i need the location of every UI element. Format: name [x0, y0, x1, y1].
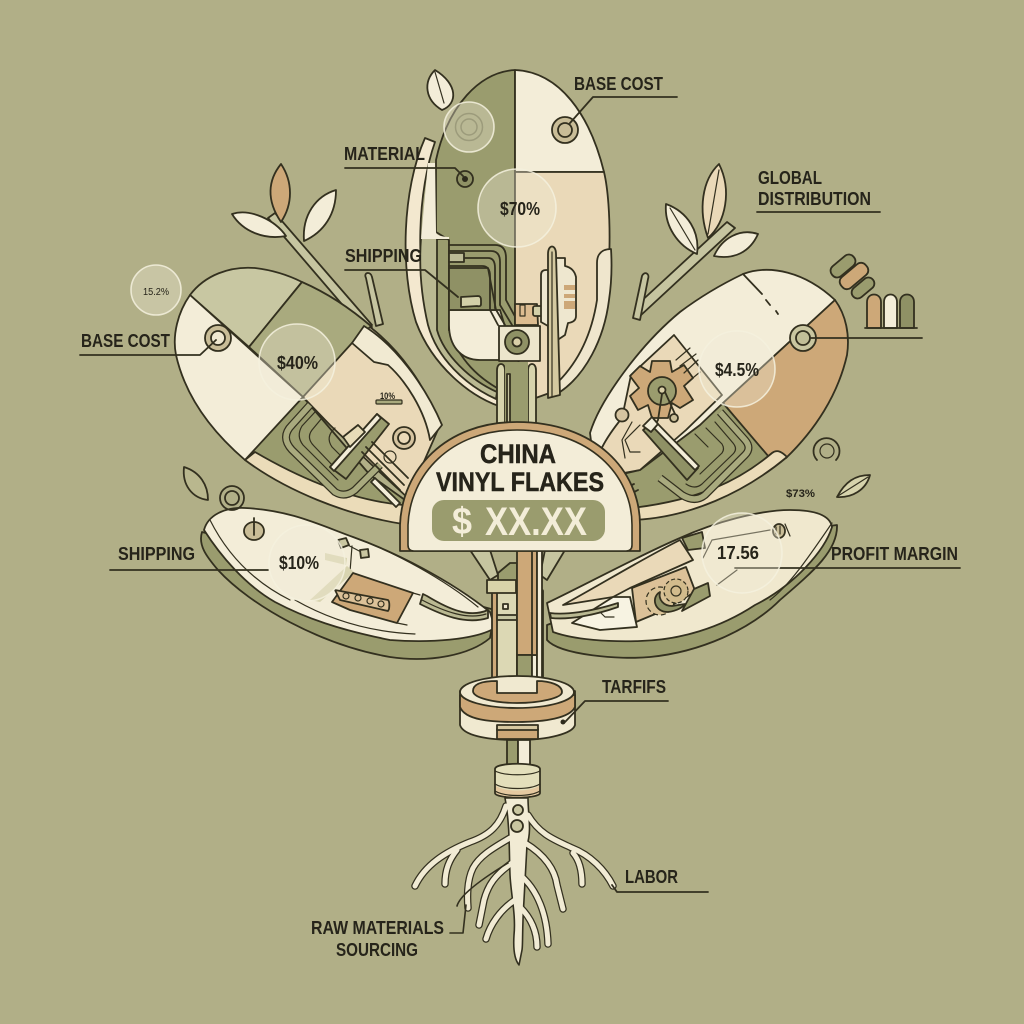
label: global distribution: GLOBAL [758, 168, 822, 188]
sector: olive lower [590, 403, 770, 520]
price pill: XX.XX [485, 500, 587, 544]
label: base cost top: BASE COST [574, 74, 663, 94]
panel: lower-left petal [201, 508, 495, 659]
bubble: $40% [259, 324, 335, 400]
sector: olive [249, 282, 372, 397]
bubble: 17.56 [702, 513, 782, 593]
root system [415, 764, 613, 965]
central sign [400, 422, 640, 551]
ghost connector [310, 553, 354, 602]
dashed divider [743, 274, 778, 314]
bubble: $40%: $40% [277, 353, 318, 373]
cream strip upper left [421, 163, 449, 239]
pale tan wedge [563, 540, 693, 605]
circuit lines [449, 245, 518, 325]
white strip [572, 597, 637, 630]
clamp plate [643, 423, 698, 480]
sector: cream [175, 295, 303, 460]
label: raw materials sourcing: SOURCING [336, 940, 418, 960]
root trunk [505, 798, 530, 965]
icon: top leaf [427, 70, 453, 110]
small label: 10% [376, 391, 402, 404]
ring: small [616, 408, 628, 422]
sector: cream top right [515, 70, 604, 172]
square hub [499, 326, 540, 361]
title: CHINA [480, 439, 556, 469]
ring: base cost node [552, 117, 578, 143]
shipping node [461, 296, 481, 307]
label: global distribution: DISTRIBUTION [758, 189, 871, 209]
sector: pale tan [303, 327, 440, 498]
outer band [406, 138, 510, 408]
label: shipping top: SHIPPING [345, 246, 422, 266]
bubble: 17.56: 17.56 [717, 543, 759, 563]
olive pocket [449, 268, 496, 310]
price pill [432, 500, 605, 544]
label: raw materials sourcing: RAW MATERIALS [311, 918, 444, 938]
sector: material olive [436, 70, 550, 388]
icon: left ring [220, 486, 244, 510]
collar [495, 764, 540, 798]
pin node [773, 524, 785, 538]
vertical rods [548, 246, 560, 398]
right leafy branch [633, 164, 758, 320]
ring: node [790, 325, 816, 351]
bottom band [245, 452, 403, 524]
bubble: 15.2% [131, 265, 181, 315]
tan circuit panel [332, 573, 413, 623]
label: profit margin: PROFIT MARGIN [831, 544, 958, 564]
wire connector [420, 594, 488, 620]
circuit ticks [676, 348, 700, 382]
sector: pale tan [515, 172, 610, 400]
bubble: $4.5% [699, 331, 775, 407]
base disc [460, 676, 575, 766]
bubble: 15.2%: 15.2% [143, 287, 169, 298]
cream strip right [558, 249, 612, 392]
bubble: $70% [478, 169, 556, 247]
pin node [244, 522, 264, 540]
bubble: $10% [269, 525, 345, 601]
label: material: MATERIAL [344, 144, 425, 164]
icon: right leaf [837, 475, 870, 497]
label: raw materials sourcing [311, 918, 444, 960]
central stem [470, 362, 565, 695]
sector: pale olive [190, 268, 302, 347]
olive base shape [245, 397, 405, 522]
bar chart icon [828, 252, 917, 328]
panel: right petal [590, 270, 848, 520]
label: global distribution [758, 168, 871, 209]
ring: material node [457, 171, 473, 187]
olive arm [682, 583, 710, 611]
bottom band [632, 451, 787, 520]
bubble: $10%: $10% [279, 553, 319, 573]
gear box [632, 567, 695, 622]
icon: right ring [814, 438, 840, 460]
label: tariffs: TARFIFS [602, 677, 666, 697]
wire connector [550, 603, 618, 618]
sector: cream [590, 270, 835, 480]
lower tan box [515, 304, 538, 325]
small label: $73%: $73% [786, 488, 815, 500]
ring: base cost node [205, 325, 231, 351]
knobs [338, 538, 369, 558]
connector lines [80, 97, 960, 933]
panel: top petal [406, 70, 612, 408]
icon: small target bubble [444, 102, 494, 152]
small label: 10%: 10% [380, 391, 395, 401]
price pill: $ [452, 501, 472, 543]
panel: lower-right petal [547, 510, 837, 658]
panel: left petal [175, 268, 442, 524]
chip body [541, 258, 576, 345]
gear [630, 361, 693, 425]
concentric pipes [660, 412, 748, 499]
clamp plate [330, 414, 389, 479]
pale tan box with gear [595, 335, 722, 478]
label: base cost left: BASE COST [81, 331, 170, 351]
bubble: $4.5%: $4.5% [715, 360, 759, 380]
label: shipping left: SHIPPING [118, 544, 195, 564]
bubble: $70%: $70% [500, 199, 540, 219]
icon: left leaf [184, 467, 208, 500]
left leafy branch [232, 164, 383, 330]
cream curve strip [352, 326, 442, 440]
subtitle: VINYL FLAKES [436, 467, 604, 497]
shape lower cream [449, 310, 515, 360]
sector: tan [723, 300, 848, 458]
pale olive inner band [420, 238, 497, 399]
label: labor: LABOR [625, 867, 678, 887]
concentric pipes [286, 405, 380, 495]
